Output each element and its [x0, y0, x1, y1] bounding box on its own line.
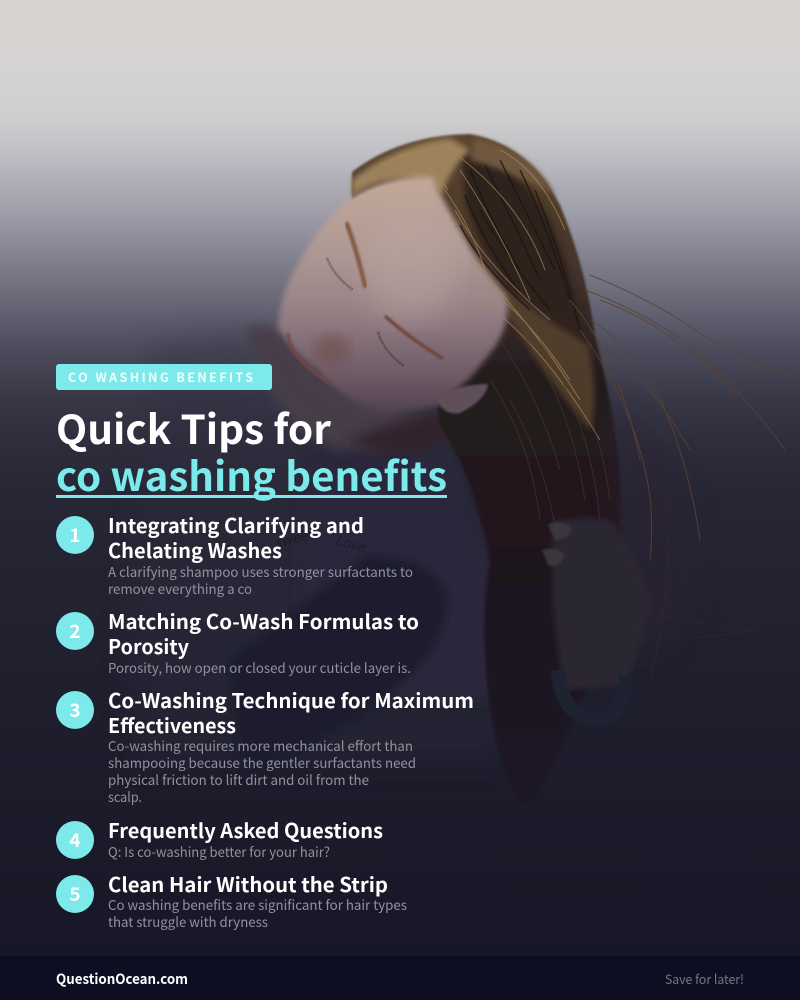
footer bar: Save for later! [665, 969, 744, 988]
bottle [230, 557, 447, 770]
ear [437, 384, 488, 413]
shirt [130, 330, 505, 760]
shirt lettering [272, 524, 369, 558]
footer bar [0, 956, 800, 1000]
tip 4 [56, 815, 383, 861]
tip 3 [56, 685, 474, 806]
title [56, 398, 447, 503]
neck and shoulder [245, 326, 440, 450]
wristband [558, 670, 626, 720]
lips [288, 333, 332, 384]
tip 2: Porosity [108, 631, 190, 660]
tip 3: scalp. [108, 786, 142, 806]
fingers [542, 522, 572, 566]
tip 3: physical friction to lift dirt and oil from the [108, 769, 369, 789]
tip 4: Q: Is co-washing better for your hair? [108, 841, 330, 861]
tip 5: Co washing benefits are significant for hair types [108, 894, 407, 914]
eyebrows [347, 224, 365, 286]
hair side haze [600, 400, 710, 660]
forehead highlight [362, 210, 458, 320]
tip 5 [56, 869, 407, 931]
shirt lettering: sweet [272, 524, 316, 553]
hair dark crown [462, 155, 585, 340]
tip 2 [56, 606, 419, 677]
tip 3: Co-washing requires more mechanical effort than [108, 735, 413, 755]
face [278, 176, 508, 414]
tip 3: Co-Washing Technique for Maximum [108, 685, 474, 714]
hair blonde front [352, 138, 470, 196]
tip 3: shampooing because the gentler surfactants need [108, 752, 416, 772]
flying strands [570, 275, 790, 560]
tip 4: Frequently Asked Questions [108, 815, 383, 844]
cheek and nose shadow [314, 334, 350, 366]
tip 5: Clean Hair Without the Strip [108, 869, 388, 898]
tip 1: Chelating Washes [108, 535, 282, 564]
neck shadow [345, 410, 470, 453]
crown strands [460, 160, 580, 330]
badge [56, 364, 272, 390]
tip 5: 5 [69, 880, 81, 907]
badge: CO WASHING BENEFITS [68, 367, 253, 386]
footer bar: QuestionOcean.com [56, 969, 188, 989]
tip 1: A clarifying shampoo uses stronger surfactants to [108, 561, 413, 581]
title: co washing benefits [56, 445, 447, 503]
tip 3: 3 [69, 696, 81, 723]
tip 1: Integrating Clarifying and [108, 510, 364, 539]
tip 2: 2 [69, 617, 81, 644]
tip 1: remove everything a co [108, 578, 252, 598]
tip 4: 4 [69, 826, 81, 853]
tip 1: 1 [69, 521, 81, 548]
tip 5: that struggle with dryness [108, 911, 268, 931]
title: Quick Tips for [56, 398, 332, 456]
tip 2: Matching Co-Wash Formulas to [108, 606, 419, 635]
eyelashes [327, 258, 353, 290]
shirt lettering: Love [333, 530, 369, 558]
hand [552, 518, 650, 690]
tip 2: Porosity, how open or closed your cuticle layer is. [108, 657, 411, 677]
hair mass [352, 134, 621, 815]
tip 1 [56, 510, 413, 598]
tip 3: Effectiveness [108, 710, 236, 739]
